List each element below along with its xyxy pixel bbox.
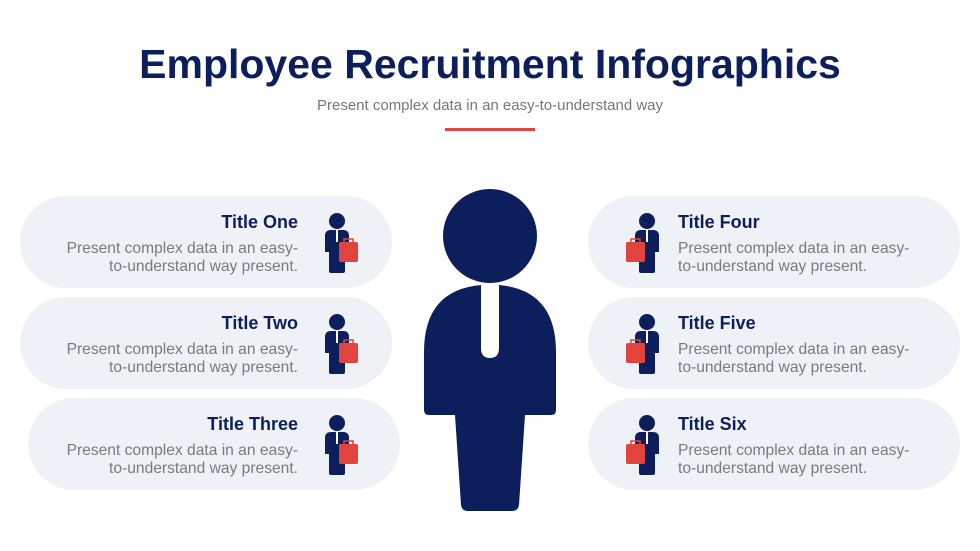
- text block: [678, 442, 909, 477]
- text block: Present complex data in an easy-: [678, 442, 909, 459]
- title: Employee Recruitment Infographics: [139, 41, 841, 87]
- heading: Title Two: [222, 313, 298, 333]
- text block: to-understand way present.: [109, 359, 298, 376]
- text block: Present complex data in an easy-: [67, 442, 298, 459]
- panel: title one: [20, 196, 392, 288]
- text block: [678, 341, 909, 376]
- panel: title six: [588, 398, 960, 490]
- text block: [678, 240, 909, 275]
- icon: employee: [325, 415, 358, 475]
- text block: [67, 240, 298, 275]
- heading: Title Four: [678, 212, 760, 232]
- icon: employee: [325, 314, 358, 374]
- text block: [67, 442, 298, 477]
- text block: Present complex data in an easy-: [67, 341, 298, 358]
- icon: employee: [626, 213, 659, 273]
- heading: Title Six: [678, 414, 747, 434]
- heading: Title One: [221, 212, 298, 232]
- text block: Present complex data in an easy-: [678, 240, 909, 257]
- heading: Title Three: [207, 414, 298, 434]
- panel: title four: [588, 196, 960, 288]
- heading: Title Five: [678, 313, 756, 333]
- text block: Present complex data in an easy-: [67, 240, 298, 257]
- text block: to-understand way present.: [109, 258, 298, 275]
- panel: title two: [20, 297, 392, 389]
- text block: to-understand way present.: [678, 258, 867, 275]
- icon: central person: [424, 189, 556, 511]
- text block: Present complex data in an easy-: [678, 341, 909, 358]
- panel: title three: [28, 398, 400, 490]
- subtitle: Present complex data in an easy-to-understand way: [317, 97, 663, 114]
- icon: employee: [325, 213, 358, 273]
- icon: employee: [626, 415, 659, 475]
- text block: [67, 341, 298, 376]
- text block: to-understand way present.: [678, 460, 867, 477]
- text block: to-understand way present.: [678, 359, 867, 376]
- panel: title five: [588, 297, 960, 389]
- accent line: [445, 128, 535, 131]
- text block: to-understand way present.: [109, 460, 298, 477]
- icon: employee: [626, 314, 659, 374]
